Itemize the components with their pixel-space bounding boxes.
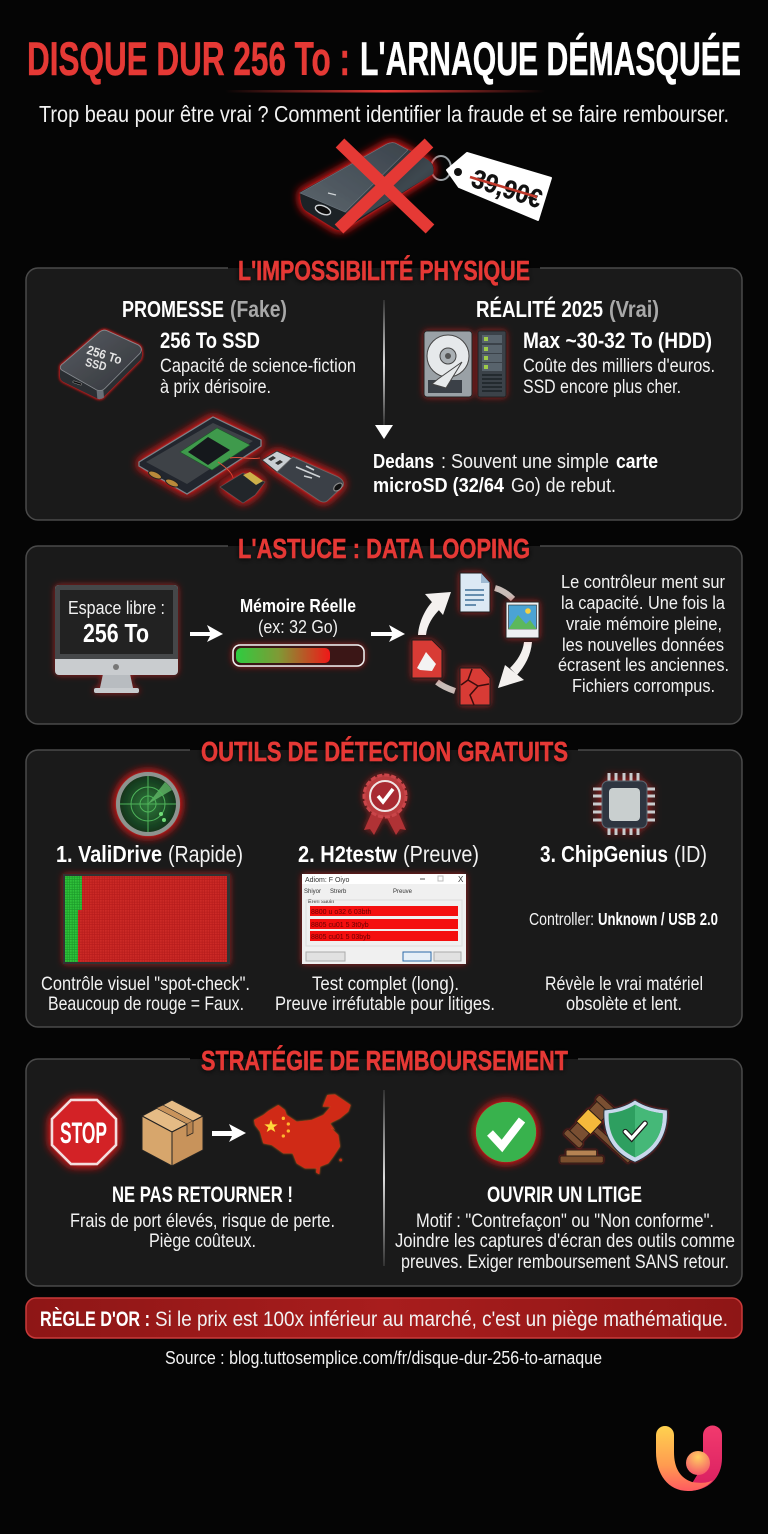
text: ValiDrive description: Beaucoup de rouge = Faux.: [48, 993, 244, 1015]
heading: ValiDrive: 1. ValiDrive: [56, 841, 162, 867]
heading: ChipGenius: 3. ChipGenius: [540, 841, 668, 867]
icon: stop sign: [52, 1100, 116, 1164]
text: explanation: [558, 571, 729, 696]
screenshot: H2testw window: 8800 u o32 6 03bth: [311, 909, 371, 916]
icon: map of China: [254, 1094, 351, 1174]
text: fake capacity: 256 To SSD: [160, 328, 260, 353]
heading: H2testw: 2. H2testw: [298, 841, 398, 867]
text: what is inside: [373, 451, 658, 497]
text: ChipGenius description: Révèle le vrai matériel: [545, 973, 703, 995]
column head: reality: (Vrai): [609, 296, 659, 322]
text: open a dispute: [395, 1182, 735, 1273]
icon: opened fake drive with USB stick and microSD: [139, 417, 344, 503]
text: what is inside: : Souvent une simple: [441, 451, 609, 473]
loop diagram: [412, 573, 539, 705]
icon: monitor: [55, 585, 178, 693]
column divider: [383, 1090, 385, 1266]
text: explanation: Le contrôleur ment sur: [561, 571, 725, 592]
column head: promise: (Fake): [230, 296, 287, 322]
icon: hard disk and server: [424, 331, 506, 397]
heading: H2testw: [298, 841, 479, 867]
icon: gavel and shield: [560, 1095, 667, 1163]
icon: chip: [593, 773, 655, 835]
screenshot: H2testw window: Strerb: [330, 889, 347, 895]
text: what is inside: microSD (32/64: [373, 475, 505, 497]
text: do not return: NE PAS RETOURNER !: [112, 1182, 293, 1207]
source: Source : blog.tuttosemplice.com/fr/disque-dur-256-to-arnaque: [165, 1348, 602, 1368]
text: controller: Controller:: [529, 909, 594, 929]
icon: green check: [476, 1102, 536, 1162]
arrow: [190, 625, 223, 642]
column head: reality: RÉALITÉ 2025: [476, 295, 603, 322]
text: explanation: la capacité. Une fois la: [561, 592, 726, 613]
icon: document: [460, 573, 490, 612]
text: ChipGenius description: [545, 973, 703, 1015]
banner: golden rule: RÈGLE D'OR :: [40, 1308, 150, 1331]
icon: corrupted file: [460, 668, 490, 705]
chart: ValiDrive sector map: [63, 874, 230, 964]
heading: ChipGenius: (ID): [674, 841, 707, 867]
text: H2testw description: Test complet (long).: [312, 973, 459, 995]
text: ValiDrive description: [41, 973, 250, 1015]
text: controller: Unknown / USB 2.0: [598, 909, 718, 929]
text: explanation: vraie mémoire pleine,: [566, 613, 722, 634]
text: real capacity: Coûte des milliers d'euros.: [523, 355, 715, 377]
text: do not return: Piège coûteux.: [149, 1230, 256, 1252]
text: ValiDrive description: Contrôle visuel "spot-check".: [41, 973, 250, 995]
icon: red cross: [339, 143, 430, 229]
memory bar: (ex: 32 Go): [258, 617, 338, 637]
screenshot: H2testw window: Adiom: F Oiyo: [305, 877, 349, 884]
screenshot: H2testw window: Eren saoin: [308, 899, 334, 905]
hero: crossed-out drive with price tag: [300, 143, 551, 230]
text: fake capacity: à prix dérisoire.: [160, 376, 271, 398]
icon: stop sign: STOP: [60, 1117, 107, 1150]
text: explanation: les nouvelles données: [562, 634, 724, 655]
arrow: [212, 1124, 246, 1142]
text: H2testw description: Preuve irréfutable pour litiges.: [275, 993, 495, 1015]
icon: monitor: Espace libre :: [68, 598, 165, 618]
icon: tag ring: [431, 156, 451, 180]
screenshot: H2testw window: Shiyor: [304, 889, 321, 895]
text: fake capacity: [160, 328, 356, 398]
faded loop segments: [437, 588, 513, 691]
icon: fake SSD: [60, 330, 142, 399]
column head: promise: PROMESSE: [122, 296, 224, 322]
text: explanation: écrasent les anciennes.: [558, 654, 729, 675]
screenshot: H2testw window: [302, 874, 466, 964]
text: H2testw description: [275, 973, 495, 1015]
screenshot: H2testw window: Preuve: [393, 889, 413, 895]
logo: [656, 1426, 722, 1491]
heading: H2testw: (Preuve): [403, 841, 479, 867]
screenshot: H2testw window: 8805 cu01 5 3t0yb: [311, 922, 369, 929]
arrow: down: [375, 300, 393, 439]
text: do not return: [70, 1182, 335, 1252]
text: open a dispute: Motif : "Contrefaçon" ou "Non conforme".: [416, 1210, 714, 1232]
icon: shield: [604, 1100, 667, 1162]
icon: price tag: 39,90€: [468, 163, 546, 214]
heading: OUTILS DE DÉTECTION GRATUITS: [201, 736, 568, 767]
text: ChipGenius description: obsolète et lent.: [566, 993, 682, 1015]
panel: physical impossibility: [26, 255, 742, 520]
memory bar: [233, 595, 364, 666]
heading: L'IMPOSSIBILITÉ PHYSIQUE: [238, 255, 530, 286]
arrow: [371, 625, 405, 642]
panel: data looping: [26, 533, 742, 724]
heading: STRATÉGIE DE REMBOURSEMENT: [201, 1045, 568, 1076]
icon: price tag: [447, 153, 551, 220]
panel: free detection tools: [26, 736, 742, 1027]
icon: gavel: [560, 1095, 632, 1163]
screenshot: H2testw window: X: [458, 875, 464, 884]
memory bar: Mémoire Réelle: [240, 595, 356, 616]
text: what is inside: Dedans: [373, 451, 434, 473]
icon: rosette: [364, 775, 406, 835]
arrow: loop up: [418, 592, 451, 635]
arrow: loop down: [498, 642, 532, 688]
title underline: [225, 90, 545, 92]
text: what is inside: Go) de rebut.: [511, 475, 616, 497]
text: real capacity: [523, 328, 715, 398]
heading: L'ASTUCE : DATA LOOPING: [238, 533, 530, 564]
text: controller: [529, 909, 718, 929]
text: what is inside: carte: [616, 451, 658, 473]
icon: fake SSD: SSD: [84, 355, 108, 374]
icon: cardboard box: [142, 1100, 203, 1166]
icon: fake SSD: 256 To: [85, 343, 124, 367]
heading: ValiDrive: [56, 841, 243, 867]
title: [27, 32, 741, 85]
heading: ValiDrive: (Rapide): [168, 841, 243, 867]
icon: picture: [506, 602, 539, 638]
banner: golden rule: [26, 1298, 742, 1338]
text: real capacity: SSD encore plus cher.: [523, 376, 681, 398]
icon: external drive: [300, 143, 434, 230]
panel: refund strategy: [26, 1045, 742, 1286]
icon: monitor: 256 To: [83, 618, 149, 648]
text: explanation: Fichiers corrompus.: [572, 675, 715, 696]
text: open a dispute: OUVRIR UN LITIGE: [487, 1182, 642, 1207]
screenshot: H2testw window: 8805 cu01 5 03byb: [311, 934, 371, 941]
icon: damaged file: [412, 640, 442, 678]
title: DISQUE DUR 256 To :: [27, 32, 350, 85]
text: do not return: Frais de port élevés, risque de perte.: [70, 1210, 335, 1232]
text: real capacity: Max ~30-32 To (HDD): [523, 328, 712, 353]
icon: radar: [116, 772, 180, 836]
text: fake capacity: Capacité de science-fiction: [160, 355, 356, 377]
